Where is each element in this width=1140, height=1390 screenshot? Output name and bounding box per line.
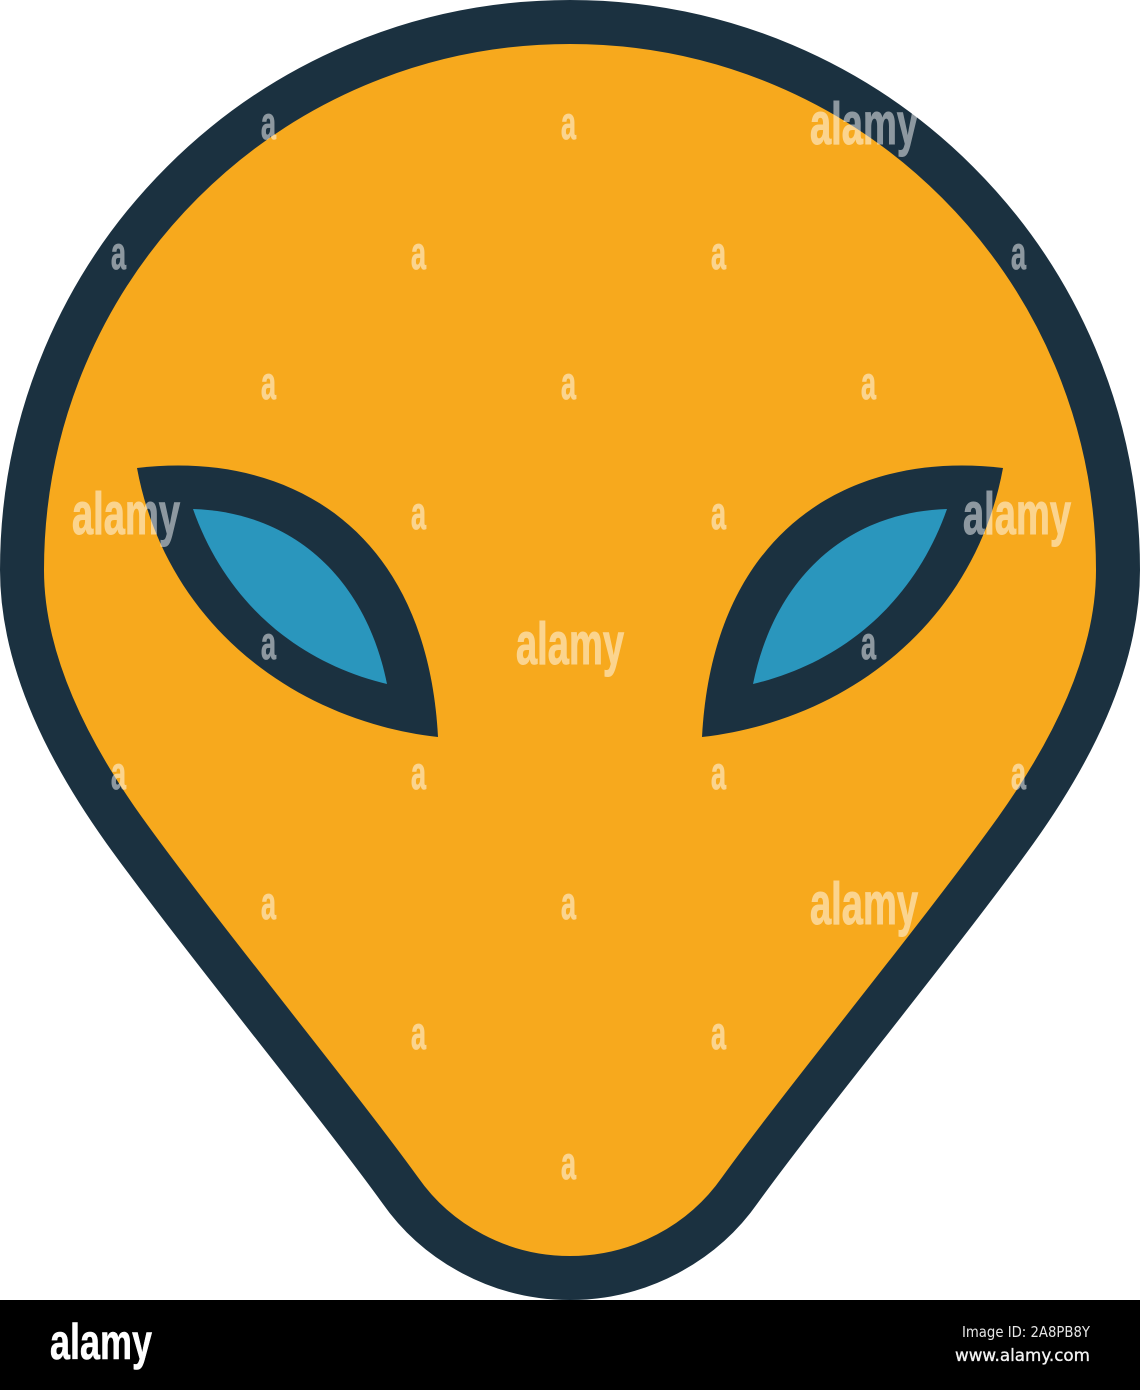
watermarks: a (711, 747, 726, 799)
watermarks: a (711, 1007, 726, 1059)
watermarks (72, 91, 1071, 1189)
watermarks: a (261, 617, 276, 669)
watermarks: a (1011, 747, 1026, 799)
watermarks: alamy (810, 91, 918, 157)
watermarks: a (111, 227, 126, 279)
watermarks: a (861, 357, 876, 409)
watermarks: a (411, 227, 426, 279)
watermarks: alamy (516, 611, 624, 677)
watermarks: a (861, 617, 876, 669)
watermarks: a (261, 357, 276, 409)
watermarks: a (261, 877, 276, 929)
watermarks: a (1011, 227, 1026, 279)
watermarks: a (561, 97, 576, 149)
watermarks: a (711, 487, 726, 539)
watermarks: alamy (963, 481, 1071, 547)
watermarks: a (561, 357, 576, 409)
watermarks: a (411, 747, 426, 799)
watermarks: a (111, 747, 126, 799)
left eye (137, 466, 438, 737)
watermarks: a (411, 1007, 426, 1059)
watermarks: a (561, 1137, 576, 1189)
right eye (702, 466, 1003, 737)
footer logo: alamy (50, 1314, 152, 1370)
watermarks: a (711, 227, 726, 279)
image id: Image ID: 2A8PB8Y (962, 1323, 1091, 1341)
watermarks: alamy (72, 481, 180, 547)
site url: www.alamy.com (955, 1346, 1090, 1366)
watermarks: a (411, 487, 426, 539)
watermarks: alamy (810, 871, 918, 937)
footer bar (0, 1300, 1140, 1390)
watermarks: a (561, 877, 576, 929)
watermarks: a (261, 97, 276, 149)
